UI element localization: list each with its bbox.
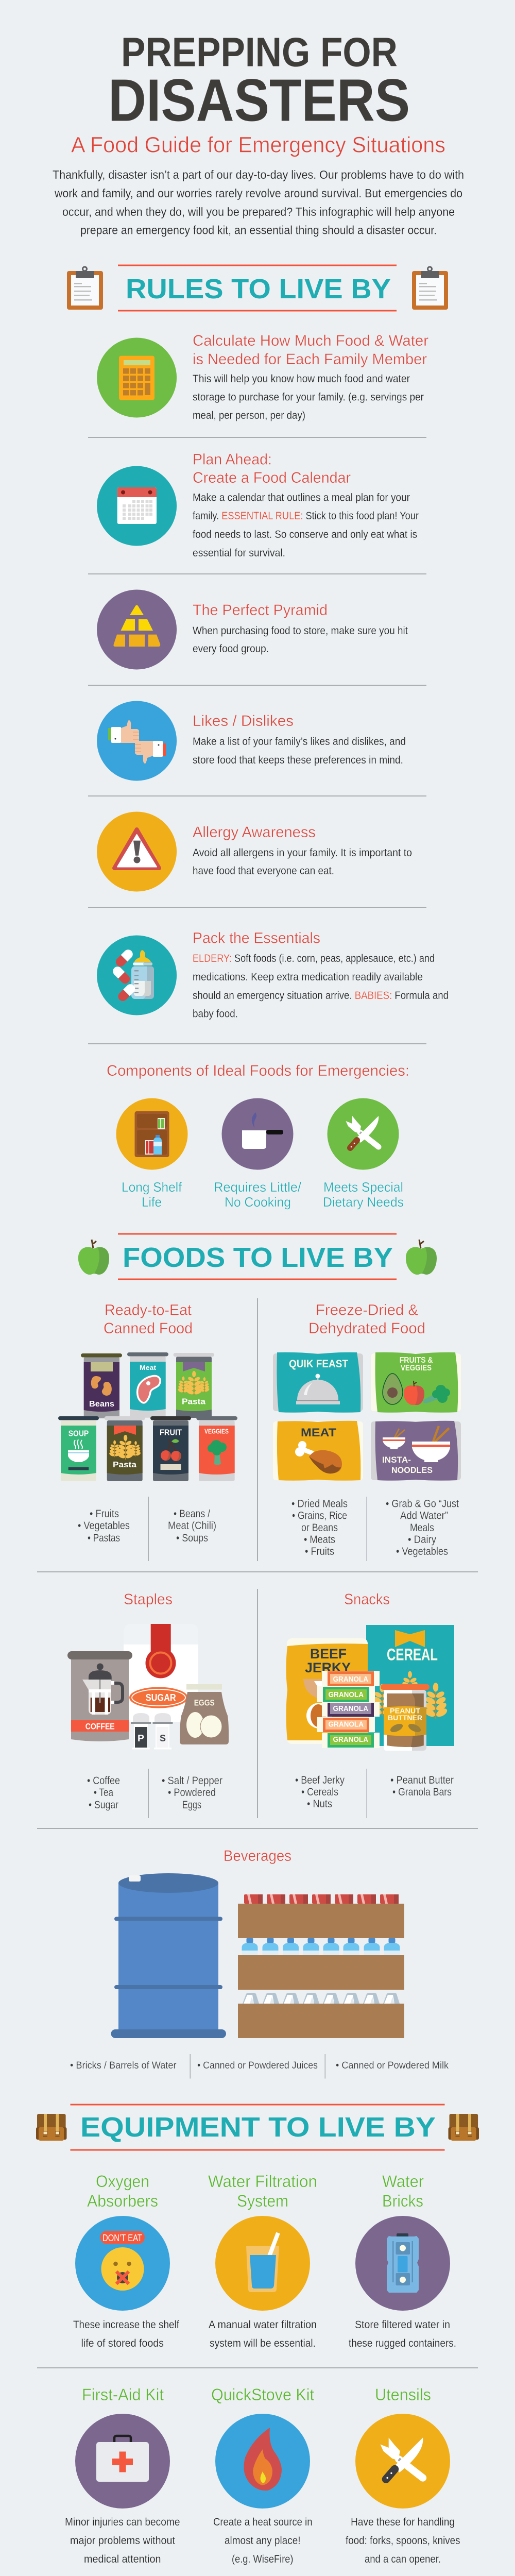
panel: equipment row 2: [65, 2385, 460, 2565]
panel: snacks: [286, 1591, 454, 1818]
bullets left: • Tea: [94, 1787, 113, 1799]
body text: medications. Keep extra medication readily available: [193, 971, 423, 983]
bullets right: • Soups: [176, 1532, 208, 1544]
illustration: granola bars: GRANOLA: [329, 1691, 364, 1699]
illustration: salt shaker: S: [160, 1733, 166, 1743]
icon: apple right: [406, 1240, 437, 1275]
heading: Beverages: [224, 1848, 291, 1865]
panel: rule 6 essentials: [97, 930, 449, 1020]
panel: rule 2 plan ahead: [97, 451, 419, 559]
icon: pills and baby bottle: [97, 936, 177, 1015]
body text: [193, 492, 419, 559]
description: life of stored foods: [81, 2337, 164, 2349]
bullets right: • Grab & Go “Just: [386, 1498, 459, 1510]
item heading: water filtration: [208, 2172, 317, 2210]
package: meat: MEAT: [301, 1426, 337, 1439]
heading: [193, 451, 351, 486]
intro paragraph: work and family, and our worries rarely revolve around survival. But emergencies do: [54, 187, 462, 200]
section title: equipment: EQUIPMENT TO LIVE BY: [80, 2112, 436, 2143]
illustration: beef jerky bag: [286, 1638, 368, 1744]
illustration: beef jerky bag: JERKY: [305, 1660, 351, 1675]
bullets left: • Meats: [304, 1534, 335, 1546]
label: [214, 1179, 302, 1210]
description: these rugged containers.: [349, 2337, 456, 2349]
package: quik feast: [273, 1352, 363, 1413]
illustration: salt shaker: [152, 1713, 173, 1750]
bullets: • Canned or Powdered Milk: [336, 2060, 449, 2071]
bullets left: [87, 1775, 120, 1811]
can: pasta green: Pasta: [182, 1398, 205, 1406]
illustration: cereal box: [366, 1625, 454, 1746]
section header: foods to live by: [78, 1233, 437, 1280]
illustration: pepper shaker: [131, 1713, 151, 1750]
intro paragraph: prepare an emergency food kit, an essential thing should a disaster occur.: [80, 224, 437, 237]
package: meat: [273, 1421, 363, 1481]
package: fruits and veggies: VEGGIES: [401, 1364, 432, 1372]
illustration: beef jerky bag: BEEF: [310, 1646, 347, 1662]
description: major problems without: [70, 2535, 175, 2547]
item heading: water filtration: System: [237, 2192, 288, 2210]
body text: store food that keeps these preferences in mind.: [193, 754, 403, 766]
panel: equipment row 1: [73, 2172, 456, 2349]
body text: family. ESSENTIAL RULE: Stick to this food plan! Your: [193, 510, 419, 522]
bullets left: • Vegetables: [78, 1520, 130, 1532]
heading: Snacks: [344, 1591, 390, 1608]
body text: food needs to last. So conserve and only eat what is: [193, 529, 417, 540]
bullets right: • Granola Bars: [392, 1786, 452, 1798]
heading: is Needed for Each Family Member: [193, 351, 427, 368]
description: A manual water filtration: [209, 2319, 317, 2331]
illustration: sugar bag: [124, 1624, 198, 1722]
can: pasta olive: [105, 1416, 145, 1481]
can: meat: Meat: [140, 1364, 157, 1371]
body text: This will help you know how much food and water: [193, 373, 410, 385]
heading: Likes / Dislikes: [193, 713, 294, 730]
icon: backpack right: [448, 2114, 479, 2141]
item heading: oxygen absorbers: Oxygen: [96, 2172, 149, 2191]
panel: rule 1 calculate: [97, 332, 428, 421]
body text: [193, 953, 449, 1020]
heading: Canned Food: [104, 1320, 193, 1337]
bullets: [70, 2060, 449, 2071]
illustration: granola bars: GRANOLA: [333, 1705, 368, 1713]
illustration: eggs bag: EGGS: [194, 1698, 215, 1708]
icon: apple left: [78, 1240, 109, 1275]
body text: have food that everyone can eat.: [193, 865, 334, 877]
body text: baby food.: [193, 1008, 238, 1020]
icon: warning triangle: [97, 812, 177, 891]
package: fruits and veggies: [371, 1352, 461, 1413]
bullets right: Meat (Chili): [168, 1520, 216, 1532]
bullets left: • Beef Jerky: [295, 1774, 345, 1786]
item heading: quickstove kit: QuickStove Kit: [211, 2385, 314, 2404]
bullets right: Meals: [410, 1522, 434, 1534]
section title: foods: FOODS TO LIVE BY: [123, 1242, 393, 1273]
icon: utensils: [355, 2414, 450, 2509]
item heading: water bricks: Bricks: [382, 2192, 423, 2210]
bullets left: • Sugar: [89, 1799, 118, 1811]
bullets left: • Fruits: [305, 1546, 334, 1557]
can: veggies: VEGGIES: [204, 1428, 229, 1435]
icon: do not eat: [75, 2216, 170, 2311]
illustration: water barrel: [111, 1873, 226, 2038]
title: DISASTERS: [108, 66, 410, 133]
bullets right: Add Water”: [400, 1510, 448, 1522]
body text: every food group.: [193, 643, 269, 655]
heading: Plan Ahead:: [193, 451, 272, 468]
description: [209, 2319, 317, 2349]
intro paragraph: occur, and when they do, will you be prepared? This infographic will help anyone: [62, 205, 455, 218]
item heading: water bricks: Water: [382, 2172, 424, 2191]
title: [108, 29, 410, 133]
section header: equipment to live by: [36, 2104, 479, 2150]
description: [65, 2516, 180, 2565]
heading: [104, 1301, 193, 1337]
icon: water brick: [355, 2216, 450, 2311]
bullets left: • Pastas: [88, 1532, 120, 1544]
bullets right: [390, 1774, 454, 1798]
body text: should an emergency situation arrive. BABIES: Formula and: [193, 990, 449, 1002]
bullets right: • Beans /: [174, 1508, 210, 1520]
label: Long Shelf: [122, 1179, 182, 1195]
illustration: granola bars: [317, 1671, 380, 1748]
description: [346, 2516, 460, 2565]
heading: The Perfect Pyramid: [193, 602, 328, 619]
item heading: oxygen absorbers: [87, 2172, 158, 2210]
illustration: peanut butter jar: [381, 1684, 430, 1751]
description: [349, 2319, 456, 2349]
can: beans: Beans: [89, 1400, 114, 1409]
illustration: granola bars: GRANOLA: [333, 1736, 368, 1744]
bullets right: • Vegetables: [396, 1546, 448, 1557]
label: [323, 1179, 404, 1210]
panel: rule 5 allergy: [97, 812, 412, 891]
bullets: • Bricks / Barrels of Water: [70, 2060, 177, 2071]
package: fruits and veggies: FRUITS &: [400, 1356, 433, 1365]
bullets left: • Coffee: [87, 1775, 120, 1787]
icon: calendar: [97, 466, 177, 546]
illustration: peanut butter jar: PEANUT: [390, 1707, 420, 1715]
body text: meal, per person, per day): [193, 410, 305, 421]
bullets right: • Powdered: [168, 1787, 216, 1799]
description: Have these for handling: [351, 2516, 455, 2528]
description: system will be essential.: [210, 2337, 316, 2349]
can: meat: [127, 1352, 168, 1418]
label: [122, 1179, 182, 1210]
bullets left: • Dried Meals: [291, 1498, 348, 1510]
heading: [308, 1301, 425, 1337]
illustration: shelf with cans, bottles and jugs: [238, 1894, 404, 2038]
section title: rules: RULES TO LIVE BY: [126, 274, 391, 304]
icon: pantry shelf: [116, 1098, 187, 1170]
body text: [193, 373, 424, 421]
can: soup: SOUP: [68, 1430, 89, 1438]
body text: storage to purchase for your family. (e.g. servings per: [193, 392, 424, 403]
bullets left: • Cereals: [301, 1786, 338, 1798]
illustration: peanut butter jar: BUTTNER: [388, 1714, 422, 1722]
can: veggies: [196, 1416, 237, 1481]
heading: Create a Food Calendar: [193, 469, 351, 486]
package: insta-noodles: INSTA-: [382, 1455, 411, 1465]
illustration: eggs bag: [180, 1684, 229, 1744]
item heading: utensils: Utensils: [375, 2385, 431, 2404]
body text: [193, 847, 412, 877]
can: fruit: [150, 1416, 191, 1481]
body text: [193, 625, 408, 655]
can: pasta green: [174, 1353, 214, 1418]
bullets left: [291, 1498, 348, 1557]
description: Store filtered water in: [355, 2319, 450, 2331]
icon: calculator: [97, 338, 177, 417]
description: almost any place!: [225, 2535, 301, 2547]
icon: first aid case: [75, 2414, 170, 2509]
icon: food pyramid: [97, 589, 177, 670]
description: and a can opener.: [365, 2553, 441, 2565]
icon: clipboard right: [412, 267, 448, 310]
panel: rule 3 pyramid: [97, 589, 408, 670]
heading: Calculate How Much Food & Water: [193, 332, 428, 349]
illustration: granola bars: GRANOLA: [333, 1675, 368, 1684]
can: pasta olive: Pasta: [113, 1461, 136, 1469]
illustration: coffee can: [67, 1651, 132, 1741]
body text: Make a calendar that outlines a meal plan for your: [193, 492, 410, 504]
illustration: pepper shaker: P: [138, 1733, 144, 1743]
bullets: • Canned or Powdered Juices: [197, 2060, 318, 2071]
can: fruit: FRUIT: [160, 1429, 182, 1437]
body text: [193, 736, 406, 766]
description: Minor injuries can become: [65, 2516, 180, 2528]
description: These increase the shelf: [73, 2319, 179, 2331]
panel: components: [116, 1098, 404, 1210]
bullets left: or Beans: [301, 1522, 338, 1534]
body text: Avoid all allergens in your family. It is important to: [193, 847, 412, 859]
bullets left: • Nuts: [307, 1798, 332, 1810]
bullets right: Eggs: [182, 1799, 201, 1811]
description: (e.g. WiseFire): [232, 2553, 294, 2565]
bullets right: [386, 1498, 459, 1557]
bullets right: [162, 1775, 222, 1811]
illustration: cans: [58, 1352, 237, 1481]
illustration: sugar bag: SUGAR: [146, 1693, 176, 1704]
panel: rule 4 likes dislikes: [97, 701, 406, 781]
description: [213, 2516, 312, 2565]
label: Life: [142, 1194, 162, 1210]
label: Dietary Needs: [323, 1194, 404, 1210]
heading: Pack the Essentials: [193, 930, 320, 947]
bullets right: • Peanut Butter: [390, 1774, 454, 1786]
item heading: first-aid kit: First-Aid Kit: [82, 2385, 164, 2404]
description: [73, 2319, 179, 2349]
title: PREPPING FOR: [121, 29, 398, 75]
description: medical attention: [84, 2553, 161, 2565]
can: soup: [58, 1416, 99, 1481]
body text: When purchasing food to store, make sure you hit: [193, 625, 408, 637]
bullets right: [168, 1508, 216, 1544]
body text: Make a list of your family’s likes and dislikes, and: [193, 736, 406, 748]
panel: canned food: [58, 1301, 237, 1561]
label: No Cooking: [225, 1194, 291, 1210]
bullets left: [78, 1508, 130, 1544]
icon: pot with steam: [221, 1098, 294, 1170]
icon: do not eat: DON’T EAT: [102, 2232, 142, 2243]
heading: components: Components of Ideal Foods for Emergencies:: [107, 1062, 409, 1079]
heading: Staples: [124, 1591, 173, 1608]
intro paragraph: [53, 168, 464, 237]
body text: essential for survival.: [193, 547, 285, 559]
illustration: cereal box: CEREAL: [387, 1646, 438, 1664]
heading: [193, 332, 428, 368]
icon: water glass with straw: [215, 2216, 310, 2311]
body text: ELDERY: Soft foods (i.e. corn, peas, applesauce, etc.) and: [193, 953, 435, 964]
package: quik feast: QUIK FEAST: [289, 1358, 348, 1370]
label: Requires Little/: [214, 1179, 302, 1195]
can: beans: [81, 1353, 122, 1418]
section header: rules to live by: [67, 265, 448, 311]
icon: fork and knife: [328, 1098, 399, 1170]
panel: staples: [67, 1591, 229, 1818]
description: food: forks, spoons, knives: [346, 2535, 460, 2547]
subtitle: A Food Guide for Emergency Situations: [71, 133, 445, 158]
heading: Freeze-Dried &: [316, 1301, 418, 1319]
package: insta-noodles: NOODLES: [391, 1465, 433, 1475]
illustration: granola bars: GRANOLA: [329, 1721, 364, 1729]
panel: freeze-dried food: [273, 1301, 461, 1561]
icon: clipboard left: [67, 267, 103, 310]
intro paragraph: Thankfully, disaster isn’t a part of our day-to-day lives. Our problems have to do with: [53, 168, 464, 181]
bullets right: • Dairy: [408, 1534, 436, 1546]
description: Create a heat source in: [213, 2516, 312, 2528]
icon: backpack left: [36, 2114, 67, 2141]
package: insta-noodles: [371, 1421, 461, 1481]
bullets right: • Salt / Pepper: [162, 1775, 222, 1787]
icon: flame: [215, 2414, 310, 2509]
bullets left: • Fruits: [90, 1508, 119, 1520]
item heading: water filtration: Water Filtration: [208, 2172, 317, 2191]
heading: Allergy Awareness: [193, 824, 316, 841]
illustration: coffee can: COFFEE: [85, 1722, 115, 1732]
item heading: water bricks: [382, 2172, 424, 2210]
bullets left: [295, 1774, 345, 1810]
item heading: oxygen absorbers: Absorbers: [87, 2192, 158, 2210]
panel: beverages: [70, 1848, 449, 2078]
label: Meets Special: [323, 1179, 403, 1195]
bullets left: • Grains, Rice: [292, 1510, 347, 1522]
heading: Dehydrated Food: [308, 1320, 425, 1337]
heading: Ready-to-Eat: [105, 1301, 192, 1319]
icon: thumbs up and down: [97, 701, 177, 781]
